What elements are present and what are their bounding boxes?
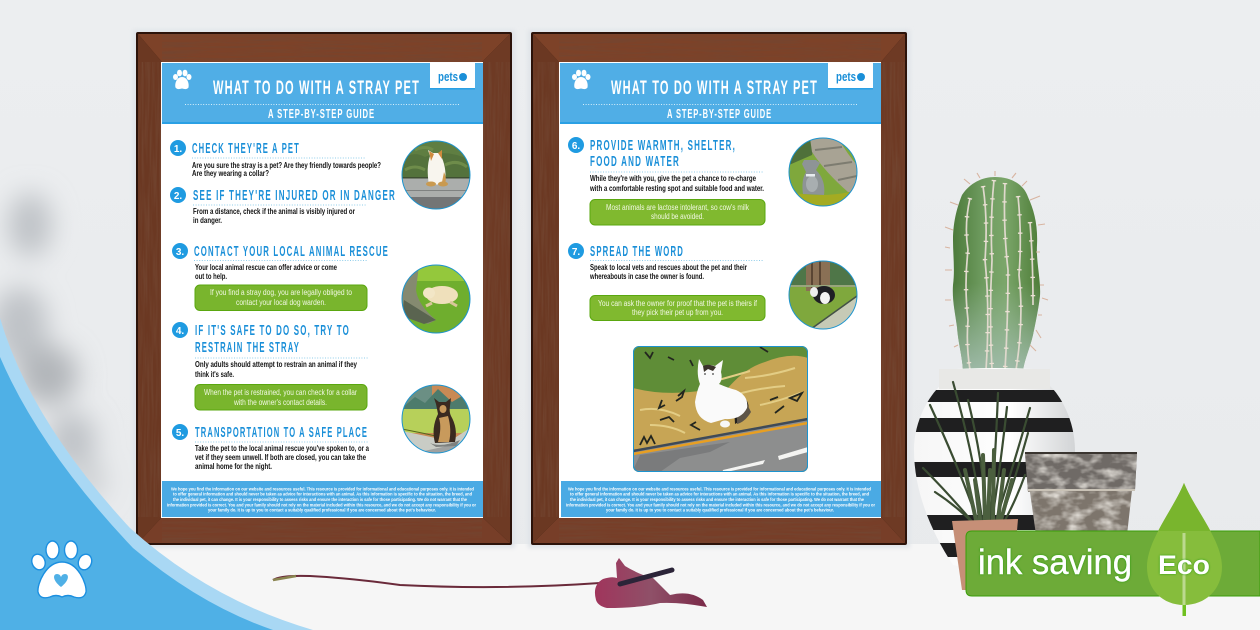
heading 4: IF IT'S SAFE TO DO SO, TRY TO xyxy=(195,323,350,339)
footer disclaimer: We hope you find the information on our website and resources useful. This resource is provided for informational and educational purposes only. It is intended xyxy=(568,486,871,492)
heading 1: CHECK THEY'RE A PET xyxy=(192,141,300,157)
panel: left poster xyxy=(161,62,483,518)
body 1: Are they wearing a collar? xyxy=(192,169,269,178)
callout 3: If you find a stray dog, you are legally obliged to xyxy=(210,288,352,297)
body 4: think it's safe. xyxy=(195,370,234,379)
heading 4 xyxy=(195,323,350,356)
heading 5: TRANSPORTATION TO A SAFE PLACE xyxy=(195,425,368,441)
heading 7: SPREAD THE WORD xyxy=(590,244,684,260)
illustration: cat on wall xyxy=(402,141,470,209)
footer disclaimer: to offer general information and should never be taken as advice for interactions with an animal. As this information is specific to the situation, the breed, and xyxy=(570,492,869,496)
leaf icon xyxy=(1147,483,1222,616)
left frame xyxy=(133,30,515,548)
footer disclaimer: information provided is correct. You and your family should not rely on the material included within this resource, and we do not accept any responsibility if you or xyxy=(167,502,476,508)
footer disclaimer: We hope you find the information on our website and resources useful. This resource is provided for informational and educational purposes only. It is intended xyxy=(171,486,474,492)
body 1: Are you sure the stray is a pet? Are they friendly towards people? xyxy=(192,161,381,170)
blue corner swoosh xyxy=(0,318,313,630)
callout 7 xyxy=(590,296,765,320)
cactus xyxy=(945,171,1048,370)
icon: paw with heart xyxy=(29,541,94,598)
icon: paw xyxy=(572,70,590,89)
footer disclaimer: your family do. It is up to you to contact a suitably qualified professional if you are concerned about the pet's behaviour. xyxy=(208,508,436,512)
body 4 xyxy=(195,360,357,379)
callout 4: with the owner's contact details. xyxy=(233,398,327,407)
body 7: Speak to local vets and rescues about the pet and their xyxy=(590,263,747,272)
illustration: dog on path xyxy=(402,385,470,453)
ink saving banner xyxy=(966,483,1260,616)
spiky plant xyxy=(923,382,1030,525)
body 5 xyxy=(195,444,369,471)
badge 3 xyxy=(172,243,188,259)
header band xyxy=(560,63,881,124)
flower on floor xyxy=(273,558,707,608)
callout 3: contact your local dog warden. xyxy=(236,298,326,307)
body 5: Take the pet to the local animal rescue you've spoken to, or a xyxy=(195,444,369,453)
body 6 xyxy=(589,174,764,193)
heading 3: CONTACT YOUR LOCAL ANIMAL RESCUE xyxy=(194,244,389,260)
heading 6: PROVIDE WARMTH, SHELTER, xyxy=(590,138,736,154)
title: WHAT TO DO WITH A STRAY PET xyxy=(213,78,420,99)
body 2: in danger. xyxy=(193,216,222,225)
right frame xyxy=(528,30,910,548)
icon: paw xyxy=(173,70,192,89)
illustration: cat by tree xyxy=(789,261,857,329)
badge 7 xyxy=(568,243,584,259)
callout 7: they pick their pet up from you. xyxy=(632,308,723,317)
logo: pets: pets xyxy=(836,69,856,84)
label: ink saving: ink saving xyxy=(978,543,1132,582)
badge 5 xyxy=(172,424,188,440)
footer disclaimer: the individual pet, it can change. It is your responsibility to assess risks and ensure the interaction is safe for those participating. We do not warrant that the xyxy=(173,497,468,502)
illustration: white cat by road xyxy=(633,346,808,473)
callout 6: should be avoided. xyxy=(651,212,704,221)
blurred plant shadow xyxy=(0,193,106,500)
header band xyxy=(162,63,483,124)
footer disclaimer xyxy=(561,481,881,517)
panel: right poster xyxy=(559,62,881,518)
badge 2: 2. xyxy=(174,191,182,202)
badge 6: 6. xyxy=(572,141,580,152)
callout 4 xyxy=(195,384,367,410)
footer disclaimer: to offer general information and should never be taken as advice for interactions with an animal. As this information is specific to the situation, the breed, and xyxy=(173,492,472,496)
subtitle: A STEP-BY-STEP GUIDE xyxy=(268,106,375,121)
body 3: Your local animal rescue can offer advice or come xyxy=(195,263,337,272)
large weathered pot xyxy=(1025,452,1137,535)
logo: pets: pets xyxy=(438,69,458,84)
badge 4: 4. xyxy=(176,326,184,337)
title: WHAT TO DO WITH A STRAY PET xyxy=(611,78,818,99)
body 4: Only adults should attempt to restrain an animal if they xyxy=(195,360,357,369)
badge 6 xyxy=(568,137,584,153)
badge 1 xyxy=(170,140,186,156)
heading 6: FOOD AND WATER xyxy=(590,154,680,170)
small clay pot xyxy=(952,519,1018,590)
callout 6 xyxy=(590,200,765,225)
body 2: From a distance, check if the animal is visibly injured or xyxy=(193,207,355,216)
body 6: While they're with you, give the pet a chance to re-charge xyxy=(590,174,756,183)
illustration: dog by stone path xyxy=(789,138,857,206)
body 7 xyxy=(589,263,747,281)
body 6: with a comfortable resting spot and suitable food and water. xyxy=(589,184,764,193)
body 2 xyxy=(193,207,355,225)
body 3: out to help. xyxy=(195,272,227,281)
heading 2: SEE IF THEY'RE INJURED OR IN DANGER xyxy=(193,188,396,204)
callout 6: Most animals are lactose intolerant, so cow's milk xyxy=(606,203,750,212)
badge 3: 3. xyxy=(176,247,184,258)
badge 1: 1. xyxy=(174,144,182,155)
badge 7: 7. xyxy=(572,247,580,258)
footer disclaimer: information provided is correct. You and your family should not rely on the material included within this resource, and we do not accept any responsibility if you or xyxy=(566,502,875,508)
body 5: animal home for the night. xyxy=(195,462,272,471)
vase xyxy=(914,368,1075,557)
heading 4: RESTRAIN THE STRAY xyxy=(195,340,300,356)
body 1 xyxy=(192,161,381,178)
body 5: vet if they seem unwell. If both are closed, you can take the xyxy=(195,453,366,462)
footer disclaimer: your family do. It is up to you to contact a suitably qualified professional if you are concerned about the pet's behaviour. xyxy=(606,508,834,512)
body 7: whereabouts in case the owner is found. xyxy=(589,272,704,281)
illustration: animal on grass xyxy=(402,265,470,333)
footer disclaimer xyxy=(162,481,483,517)
body 3 xyxy=(195,263,337,281)
heading 6 xyxy=(590,138,736,170)
callout 4: When the pet is restrained, you can check for a collar xyxy=(204,388,357,397)
callout 3 xyxy=(195,285,367,310)
footer disclaimer: the individual pet, it can change. It is your responsibility to assess risks and ensure the interaction is safe for those participating. We do not warrant that the xyxy=(570,497,865,502)
label: Eco: Eco xyxy=(1158,550,1210,580)
badge 5: 5. xyxy=(176,428,184,439)
callout 7: You can ask the owner for proof that the pet is theirs if xyxy=(598,299,758,308)
badge 4 xyxy=(172,322,188,338)
subtitle: A STEP-BY-STEP GUIDE xyxy=(667,106,772,121)
badge 2 xyxy=(170,187,186,203)
